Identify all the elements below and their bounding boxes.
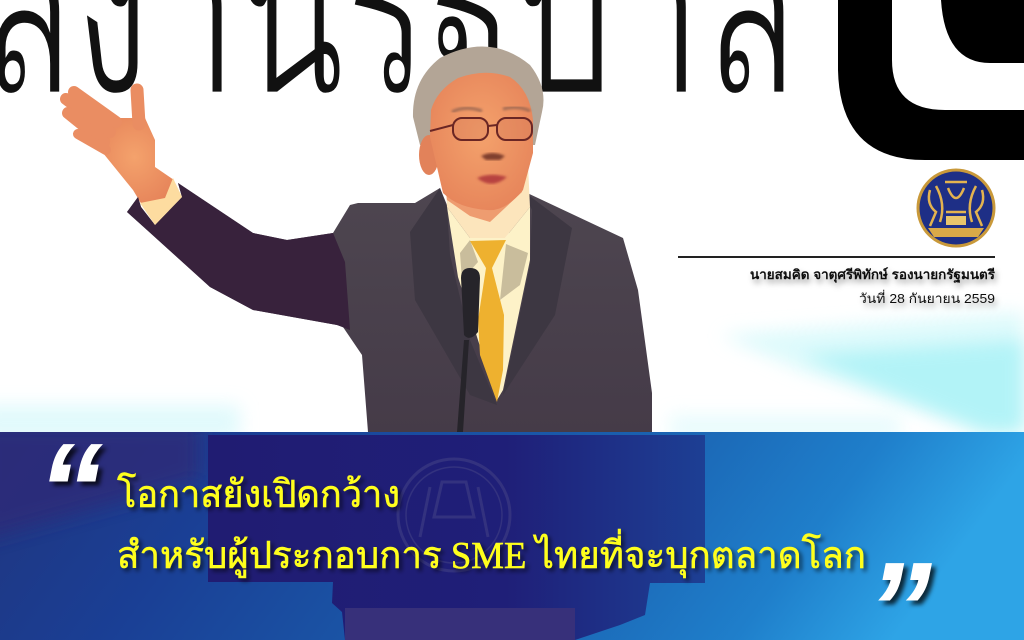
divider rule xyxy=(678,256,995,258)
hair xyxy=(413,47,544,145)
caption xyxy=(750,267,995,306)
background: stage screen xyxy=(0,0,1024,440)
speaker name: นายสมคิด จาตุศรีพิทักษ์ รองนายกรัฐมนตรี xyxy=(750,267,995,284)
lapel left xyxy=(410,188,497,405)
emblem xyxy=(916,168,996,248)
podium emblem xyxy=(398,459,510,571)
suit jacket xyxy=(127,183,652,432)
collar shadow xyxy=(460,240,528,300)
neck xyxy=(445,165,530,238)
eyebrows, nose, mouth xyxy=(452,107,530,112)
shirt xyxy=(447,207,530,400)
quote line 2: สำหรับผู้ประกอบการ SME ไทยที่จะบุกตลาดโลก xyxy=(117,529,866,578)
ear xyxy=(419,135,439,175)
glasses xyxy=(430,118,532,140)
quote line 1: โอกาสยังเปิดกว้าง xyxy=(117,472,400,516)
podium xyxy=(208,435,705,640)
speaker xyxy=(66,47,652,432)
face xyxy=(430,73,533,210)
microphone xyxy=(457,268,480,432)
quote band xyxy=(0,425,1024,640)
hand xyxy=(66,90,174,205)
lapel right xyxy=(503,191,572,395)
sleeve xyxy=(127,183,350,330)
date: วันที่ 28 กันยายน 2559 xyxy=(859,290,995,306)
cuff xyxy=(140,178,182,225)
banner logo shape xyxy=(838,0,1024,160)
tie xyxy=(470,240,506,402)
podium lower xyxy=(345,608,575,640)
